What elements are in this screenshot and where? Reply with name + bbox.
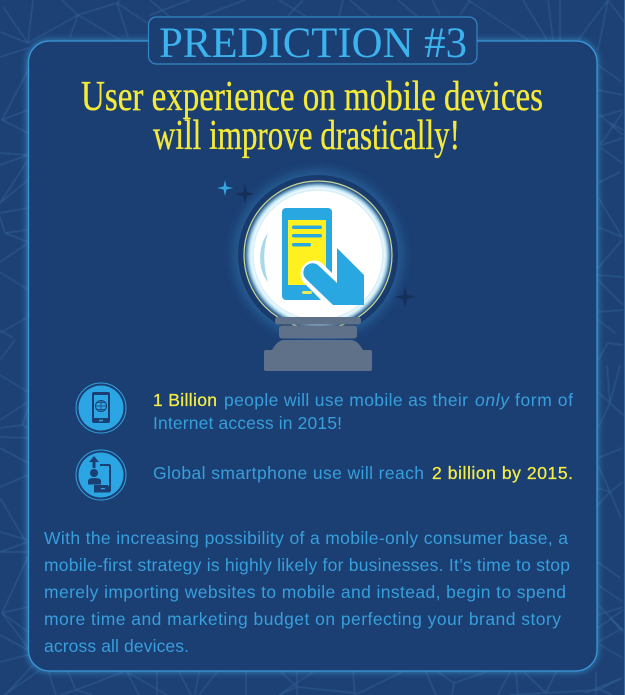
bullet text: mobile only (153, 390, 573, 433)
bullet text: mobile only: form of (515, 390, 573, 410)
body paragraph: more time and marketing budget on perfecting your brand story (44, 609, 561, 629)
bullet text: smartphone use (153, 463, 573, 483)
bullet text: mobile only: people will use mobile as their (224, 390, 468, 410)
body paragraph (44, 528, 570, 656)
body paragraph: mobile-first strategy is highly likely for businesses. It’s time to stop (44, 555, 570, 575)
icon: person and phone with arrow (76, 450, 126, 500)
sparkles (217, 180, 416, 308)
body paragraph: merely importing websites to mobile and instead, begin to spend (44, 582, 566, 602)
title badge: PREDICTION #3 (159, 20, 467, 67)
orb shell (238, 175, 398, 335)
icon: crystal ball (234, 171, 402, 371)
bullet text: mobile only: 1 Billion (153, 390, 217, 410)
body paragraph: With the increasing possibility of a mobile-only consumer base, a (44, 528, 568, 548)
bullet text: smartphone use: Global smartphone use will reach (153, 463, 424, 483)
hand pointing (303, 248, 364, 305)
orb reflection (260, 233, 268, 282)
heading: will improve drastically! (153, 113, 460, 159)
phone (282, 208, 332, 300)
icon: phone with globe (76, 383, 126, 433)
stand (264, 317, 372, 371)
bullet text: mobile only: Internet access in 2015! (153, 413, 342, 433)
bullet text: mobile only: only (475, 390, 510, 410)
body paragraph: across all devices. (44, 636, 189, 656)
heading (81, 74, 543, 159)
bullet text: smartphone use: 2 billion by 2015. (432, 463, 573, 483)
